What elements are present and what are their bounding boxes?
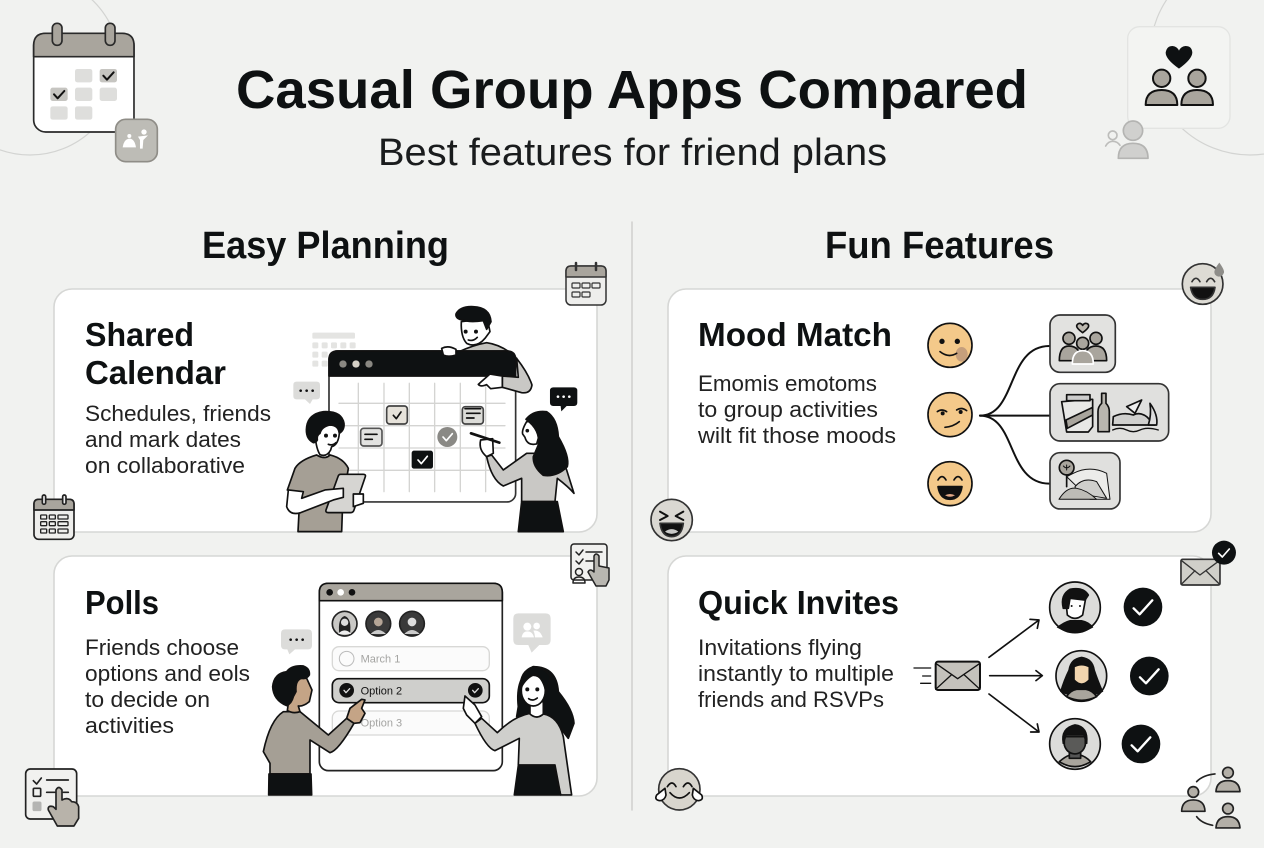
heading: Shared Calendar: Shared bbox=[85, 316, 194, 353]
avatar: friend three bbox=[1050, 719, 1100, 769]
illustration: friends voting in poll: Option 2 bbox=[361, 685, 402, 697]
text: shared calendar description: and mark dates bbox=[85, 427, 241, 452]
heading: Easy Planning: Easy Planning bbox=[202, 225, 449, 267]
icon: check confirmations bbox=[1122, 588, 1169, 763]
icon: calendar badge bottom left bbox=[34, 495, 74, 539]
avatar: friend two bbox=[1056, 651, 1107, 701]
connector lines bbox=[980, 346, 1049, 484]
icon: smiling emoji bbox=[928, 323, 972, 367]
icon: poll checklist hand bottom left bbox=[26, 769, 79, 826]
heading: Quick Invites: Quick Invites bbox=[698, 584, 899, 621]
text: quick invites description: Invitations flying bbox=[698, 635, 862, 660]
icon: envelope with check badge bbox=[1181, 541, 1236, 585]
icon: large calendar bbox=[34, 23, 134, 132]
icon: smirking emoji bbox=[928, 393, 972, 437]
subtitle: Best features for friend plans bbox=[378, 132, 887, 174]
icon: small group tile bbox=[116, 119, 157, 162]
icon: friends group tile bbox=[1050, 315, 1115, 372]
text: polls description: options and eols bbox=[85, 661, 250, 686]
icon: faded people bbox=[1106, 121, 1148, 158]
icon: squinting laughing emoji badge bbox=[651, 499, 692, 541]
diagram: moods to activities bbox=[928, 315, 1169, 509]
text: polls description: Friends choose bbox=[85, 635, 239, 660]
icon: outing activities tile bbox=[1050, 384, 1169, 441]
text: shared calendar description: Schedules, friends bbox=[85, 401, 271, 426]
text: polls description: to decide on bbox=[85, 687, 210, 712]
icon: sweat laughing emoji badge bbox=[1182, 263, 1224, 304]
text: mood match description: to group activities bbox=[698, 397, 878, 422]
icon: friend circle network bbox=[1182, 767, 1240, 828]
text: quick invites description: friends and RSVPs bbox=[698, 687, 884, 712]
icon: tears of joy emoji badge bbox=[656, 769, 702, 810]
icon: poll checklist badge top right bbox=[571, 544, 609, 586]
arrows bbox=[989, 619, 1042, 732]
illustration: friends voting in poll: Option 3 bbox=[361, 717, 402, 729]
icon: friends and heart tile bbox=[1128, 27, 1230, 128]
panel: quick invites bbox=[668, 556, 1211, 796]
text: shared calendar description bbox=[85, 401, 271, 478]
text: polls description bbox=[85, 635, 250, 738]
illustration: team around calendar bbox=[287, 307, 577, 532]
text: quick invites description bbox=[698, 635, 894, 712]
text: mood match description: Emomis emotoms bbox=[698, 371, 877, 396]
text: mood match description: wilt fit those moods bbox=[697, 423, 896, 448]
text: mood match description bbox=[697, 371, 896, 448]
icon: flying envelope bbox=[914, 662, 980, 690]
panel: mood match bbox=[668, 289, 1211, 532]
panel: shared calendar bbox=[54, 289, 597, 532]
title: Casual Group Apps Compared bbox=[236, 60, 1028, 120]
illustration: friends voting in poll bbox=[263, 583, 574, 795]
icon: cave outing tile bbox=[1050, 453, 1120, 509]
text: polls description: activities bbox=[85, 713, 174, 738]
illustration: friends voting in poll: March 1 bbox=[361, 653, 400, 665]
text: quick invites description: instantly to multiple bbox=[698, 661, 894, 686]
icon: laughing emoji bbox=[928, 462, 972, 506]
heading: Fun Features: Fun Features bbox=[825, 225, 1054, 267]
avatar: friend one bbox=[1050, 582, 1100, 633]
heading: Mood Match: Mood Match bbox=[698, 316, 892, 353]
icon: calendar badge top right bbox=[566, 263, 606, 305]
heading: Polls: Polls bbox=[85, 584, 159, 621]
heading: Shared Calendar: Calendar bbox=[85, 354, 226, 391]
diagram: invitation flow bbox=[914, 582, 1169, 769]
heading: Shared Calendar bbox=[85, 316, 226, 391]
panel: polls bbox=[54, 556, 597, 796]
text: shared calendar description: on collaborative bbox=[85, 453, 245, 478]
